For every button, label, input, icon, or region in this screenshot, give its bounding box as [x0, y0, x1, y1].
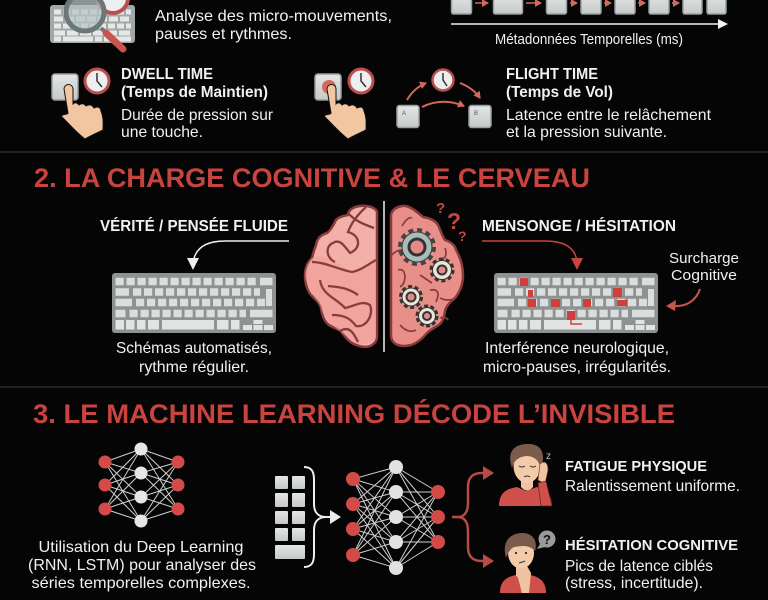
icon: flight keys and arcs: A: [402, 111, 406, 117]
text: deep learning: (RNN, LSTM) pour analyser des: [28, 557, 256, 574]
panel: section 1 frappe clavier: [50, 0, 728, 141]
text: deep learning: Utilisation du Deep Learning: [38, 539, 243, 556]
text: fatigue physique: Ralentissement uniforme.: [565, 478, 740, 495]
label: mensonge: [482, 218, 676, 270]
text: dwell time: (Temps de Maintien): [121, 84, 268, 101]
icon: brace arrow: [304, 467, 341, 567]
divider: brain axis: [383, 201, 385, 352]
text: flight time: FLIGHT TIME: [506, 66, 598, 83]
text: dwell time: [121, 66, 274, 141]
icon: hesitant person: ?: [543, 532, 551, 547]
icon: hesitant person: [500, 530, 556, 593]
icon: keystroke timeline: [451, 0, 728, 29]
text: dwell time: Durée de pression sur: [121, 107, 274, 124]
panel: section 3 machine learning: [28, 398, 740, 593]
icon: keypad keys: [275, 476, 305, 559]
text: hesitation cognitive: HÉSITATION COGNITIVE: [565, 537, 738, 554]
icon: tired person: z: [546, 451, 551, 462]
icon: question marks: ?: [458, 228, 467, 244]
text: deep learning: [28, 539, 256, 592]
icon: large neural network: [346, 460, 445, 575]
callout: surcharge cognitive: Cognitive: [671, 267, 737, 284]
icon: flight keys and arcs: [397, 70, 491, 128]
icon: tired person: [499, 444, 552, 506]
text: dwell time: une touche.: [121, 124, 203, 141]
text: interference: [483, 340, 671, 376]
text: dwell time: DWELL TIME: [121, 66, 213, 83]
caption: metadonnees: Métadonnées Temporelles (ms): [495, 32, 683, 48]
panel: section 2 charge cognitive: [34, 163, 739, 376]
icon: keyboard under magnifier: [50, 0, 135, 49]
text: analyse: [155, 8, 392, 43]
text: fatigue physique: FATIGUE PHYSIQUE: [565, 458, 707, 475]
text: flight time: Latence entre le relâchement: [506, 107, 712, 124]
icon: pressed key with hand: [315, 69, 373, 139]
icon: dwell key and clock: [52, 69, 109, 139]
text: flight time: et la pression suivante.: [506, 124, 667, 141]
text: analyse: Analyse des micro-mouvements,: [155, 8, 392, 25]
text: hesitation cognitive: [565, 537, 738, 592]
text: schemas: [116, 340, 272, 376]
heading: section 3: 3. LE MACHINE LEARNING DÉCODE L’INVISIBLE: [33, 398, 675, 429]
icon: disturbed keyboard: [494, 273, 658, 333]
icon: regular keyboard: [112, 273, 276, 333]
icon: overloaded brain hemisphere: [391, 206, 463, 346]
icon: question marks: [436, 200, 467, 244]
text: schemas: rythme régulier.: [139, 359, 249, 376]
heading: section 2: 2. LA CHARGE COGNITIVE & LE CERVEAU: [34, 163, 590, 193]
text: flight time: (Temps de Vol): [506, 84, 613, 101]
icon: fluid brain hemisphere: [305, 206, 377, 347]
label: verite: VÉRITÉ / PENSÉE FLUIDE: [100, 218, 288, 235]
icon: question marks: ?: [436, 200, 445, 217]
callout: surcharge cognitive: [666, 250, 739, 311]
text: fatigue physique: [565, 458, 740, 495]
text: hesitation cognitive: Pics de latence ciblés: [565, 558, 713, 575]
text: interference: Interférence neurologique,: [485, 340, 669, 357]
text: schemas: Schémas automatisés,: [116, 340, 272, 357]
label: mensonge: MENSONGE / HÉSITATION: [482, 218, 676, 235]
icon: small neural network: [98, 442, 184, 528]
icon: flight keys and arcs: B: [474, 111, 478, 117]
text: analyse: pauses et rythmes.: [155, 26, 292, 43]
icon: gears: [400, 230, 453, 326]
icon: question marks: ?: [447, 208, 461, 234]
callout: surcharge cognitive: Surcharge: [669, 250, 739, 267]
text: deep learning: séries temporelles complexes.: [32, 575, 250, 592]
label: verite: [100, 218, 289, 270]
icon: branching arrow: [452, 466, 494, 568]
text: hesitation cognitive: (stress, incertitude).: [565, 575, 703, 592]
text: interference: micro-pauses, irrégularités.: [483, 359, 671, 376]
text: flight time: [506, 66, 712, 141]
